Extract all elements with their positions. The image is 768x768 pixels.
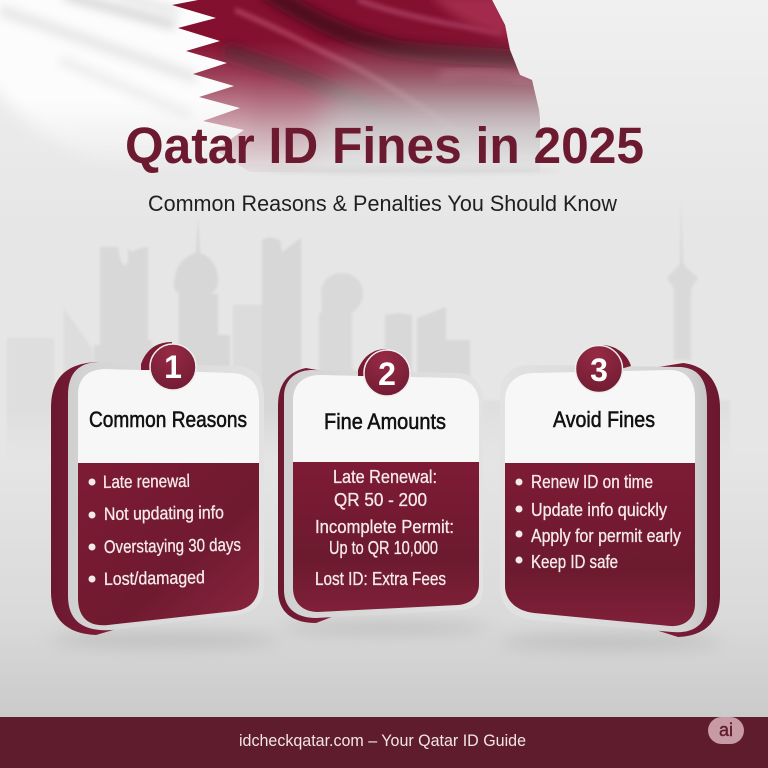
card 1 heading: Common Reasons (89, 407, 247, 432)
card 1 list: Late renewal (103, 471, 190, 492)
footer text: idcheckqatar.com – Your Qatar ID Guide (239, 731, 526, 750)
flag maroon field (172, 0, 540, 172)
card 2 heading: Fine Amounts (324, 409, 446, 434)
card 2 fine list: Incomplete Permit: (315, 517, 454, 537)
card 1 list: Overstaying 30 days (104, 535, 241, 557)
flag fade shadow (260, 167, 560, 175)
ai badge: ai (719, 720, 733, 740)
flag white hoist (0, 0, 244, 140)
card shadows (50, 622, 722, 649)
card 1 back layers (51, 362, 264, 635)
ai badge (708, 717, 744, 744)
footer bar (0, 717, 768, 768)
card 3 list: Renew ID on time (531, 472, 653, 492)
card 3 list: Apply for permit early (531, 526, 681, 546)
subtitle: Common Reasons & Penalties You Should Know (148, 191, 617, 216)
card 3 number badge (576, 345, 631, 392)
card 3 number badge: 3 (590, 352, 608, 388)
card 1 number badge (141, 342, 196, 390)
card 1 maroon body (78, 463, 259, 625)
card 3 maroon body (505, 463, 695, 626)
card 1 number badge: 1 (164, 349, 182, 385)
panel: fine amounts (278, 349, 483, 623)
card 1 list: Lost/damaged (104, 567, 205, 589)
card 2 fine list (315, 467, 454, 589)
card 1 list: Not updating info (104, 502, 224, 524)
panel: avoid fines (500, 345, 720, 637)
card 1 list (88, 471, 241, 589)
city skyline silhouette (66, 232, 697, 432)
card 3 list: Update info quickly (531, 500, 667, 520)
title: Qatar ID Fines in 2025 (125, 117, 644, 174)
card 2 fine list: Lost ID: Extra Fees (315, 569, 446, 589)
card 2 fine list: Up to QR 10,000 (329, 538, 438, 558)
card 3 back layers (500, 363, 720, 637)
card 2 number badge: 2 (378, 356, 396, 392)
card 3 heading: Avoid Fines (553, 407, 655, 432)
card 3 list (516, 472, 681, 572)
panel: common reasons (51, 342, 264, 635)
flag (0, 0, 540, 174)
card 3 white header (505, 370, 695, 463)
card 2 number badge (358, 349, 410, 396)
card 2 white header (293, 375, 479, 462)
card 2 back layers (278, 368, 483, 623)
card 2 fine list: Late Renewal: (333, 467, 437, 487)
card 1 white header (78, 369, 259, 463)
card 2 maroon body (293, 462, 479, 612)
card 2 fine list: QR 50 - 200 (334, 490, 427, 510)
card 3 list: Keep ID safe (531, 552, 618, 572)
